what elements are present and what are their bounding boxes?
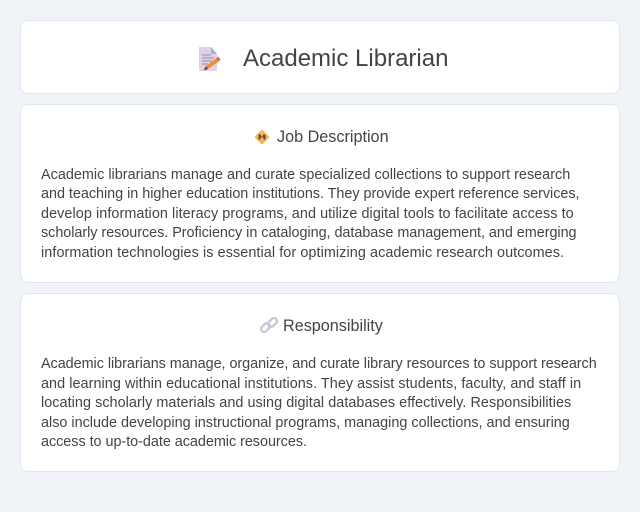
text block: responsibility: locating scholarly materials and using digital databases effectively. Responsibilities	[41, 395, 571, 411]
text block: job description: scholarly resources. Proficiency in cataloging, database management, and emerging	[41, 225, 577, 241]
heading: job description: Job Description	[277, 128, 389, 146]
text block: responsibility	[41, 356, 597, 450]
text block: responsibility: Academic librarians manage, organize, and curate library resources to support research	[41, 356, 597, 372]
text block: responsibility: access to up-to-date academic resources.	[41, 434, 307, 450]
panel: job description	[20, 104, 620, 283]
text block: job description: develop information literacy programs, and utilize digital tools to facilitate access to	[41, 206, 574, 222]
heading: responsibility: Responsibility	[283, 316, 383, 334]
text block: responsibility: also include developing instructional programs, managing collections, and ensuring	[41, 414, 570, 430]
icon: diamond sign	[255, 130, 269, 144]
panel: title card	[20, 20, 620, 94]
panel: responsibility	[20, 293, 620, 472]
text block: job description: Academic librarians manage and curate specialized collections to support research	[41, 166, 570, 182]
text block: responsibility: and learning within educational institutions. They assist students, faculty, and staff in	[41, 376, 581, 392]
text block: job description: information technologies is essential for optimizing academic research outcomes.	[41, 244, 564, 260]
icon: document with pencil	[199, 47, 220, 71]
icon: chain link	[260, 316, 278, 334]
title: Academic Librarian	[243, 45, 448, 72]
text block: job description: and teaching in higher education institutions. They provide expert reference services,	[41, 186, 580, 202]
text block: job description	[41, 166, 580, 260]
